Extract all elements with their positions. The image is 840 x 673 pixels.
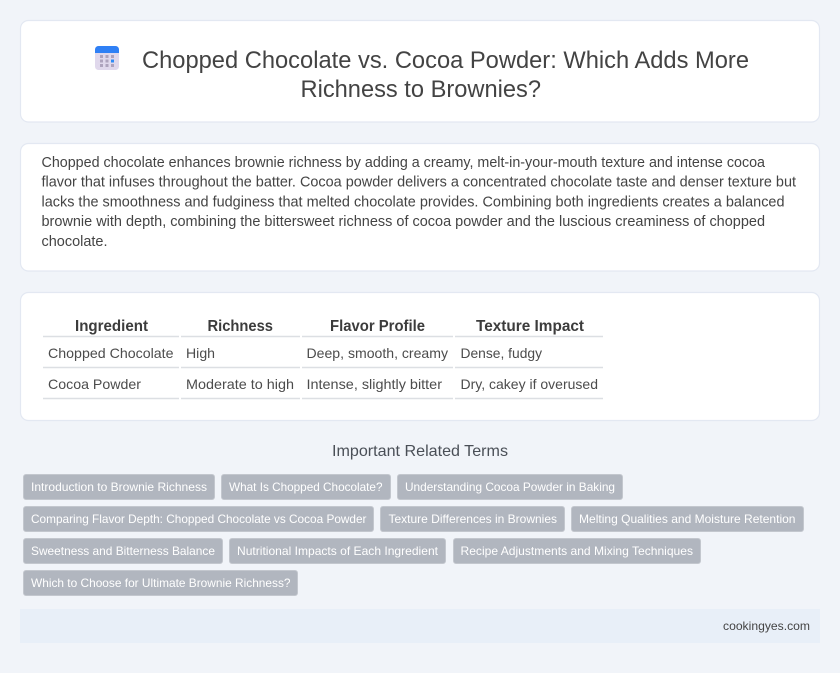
tag [24, 570, 298, 596]
tag [24, 474, 214, 500]
tag: Which to Choose for Ultimate Brownie Richness? [31, 576, 291, 590]
tag list: related terms [24, 474, 804, 596]
text block: description: flavor that infuses throughout the batter. Cocoa powder delivers a concentrated chocolate taste and denser texture but [42, 174, 796, 190]
tag [572, 506, 804, 532]
tag: What Is Chopped Chocolate? [229, 480, 383, 494]
tag: Melting Qualities and Moisture Retention [579, 512, 796, 526]
table row: chopped chocolate: High [186, 345, 215, 361]
tag: Sweetness and Bitterness Balance [31, 544, 215, 558]
text block: description: chocolate. [42, 234, 108, 250]
table row: cocoa powder: Cocoa Powder [48, 376, 141, 392]
table row: chopped chocolate [48, 345, 542, 361]
table header: Richness [208, 318, 273, 335]
table header: Ingredient [75, 318, 149, 335]
table header: Flavor Profile [330, 318, 425, 335]
tag: Nutritional Impacts of Each Ingredient [237, 544, 439, 558]
panel: description [20, 144, 820, 271]
table row: chopped chocolate: Chopped Chocolate [48, 345, 174, 361]
text block: description: brownie with depth, combining the bittersweet richness of cocoa powder and the luscious creaminess of chopped [42, 214, 765, 230]
footer: cookingyes.com [723, 619, 810, 633]
panel: header [20, 20, 820, 122]
tag: Comparing Flavor Depth: Chopped Chocolate vs Cocoa Powder [31, 512, 366, 526]
table row: cocoa powder: Moderate to high [186, 376, 294, 392]
tag [24, 506, 374, 532]
table row: cocoa powder [48, 376, 598, 392]
tag [454, 538, 700, 564]
text block: description [42, 155, 796, 250]
tag: Texture Differences in Brownies [388, 512, 557, 526]
text block: description: lacks the smoothness and fudginess that melted chocolate provides. Combining both ingredients creates a balanced [42, 194, 785, 210]
title: Richness to Brownies? [300, 76, 541, 103]
title [142, 47, 749, 103]
tag [380, 506, 564, 532]
tag [230, 538, 446, 564]
table header [75, 318, 585, 335]
tag [24, 538, 222, 564]
panel: comparison table [20, 292, 820, 420]
tag [222, 474, 390, 500]
tag: Introduction to Brownie Richness [31, 480, 207, 494]
heading: related terms: Important Related Terms [332, 443, 508, 460]
table row: chopped chocolate: Dense, fudgy [460, 345, 542, 361]
title: Chopped Chocolate vs. Cocoa Powder: Which Adds More [142, 47, 749, 74]
table row: cocoa powder: Dry, cakey if overused [460, 376, 598, 392]
text block: description: Chopped chocolate enhances brownie richness by adding a creamy, melt-in-your-mouth texture and intense cocoa [42, 155, 765, 171]
tag: Recipe Adjustments and Mixing Techniques [460, 544, 693, 558]
table row: cocoa powder: Intense, slightly bitter [306, 376, 442, 392]
tag: Understanding Cocoa Powder in Baking [405, 480, 615, 494]
footer [20, 609, 820, 643]
table header: Texture Impact [476, 318, 585, 335]
table row: chopped chocolate: Deep, smooth, creamy [306, 345, 448, 361]
icon: calendar [95, 46, 119, 70]
tag [398, 474, 622, 500]
